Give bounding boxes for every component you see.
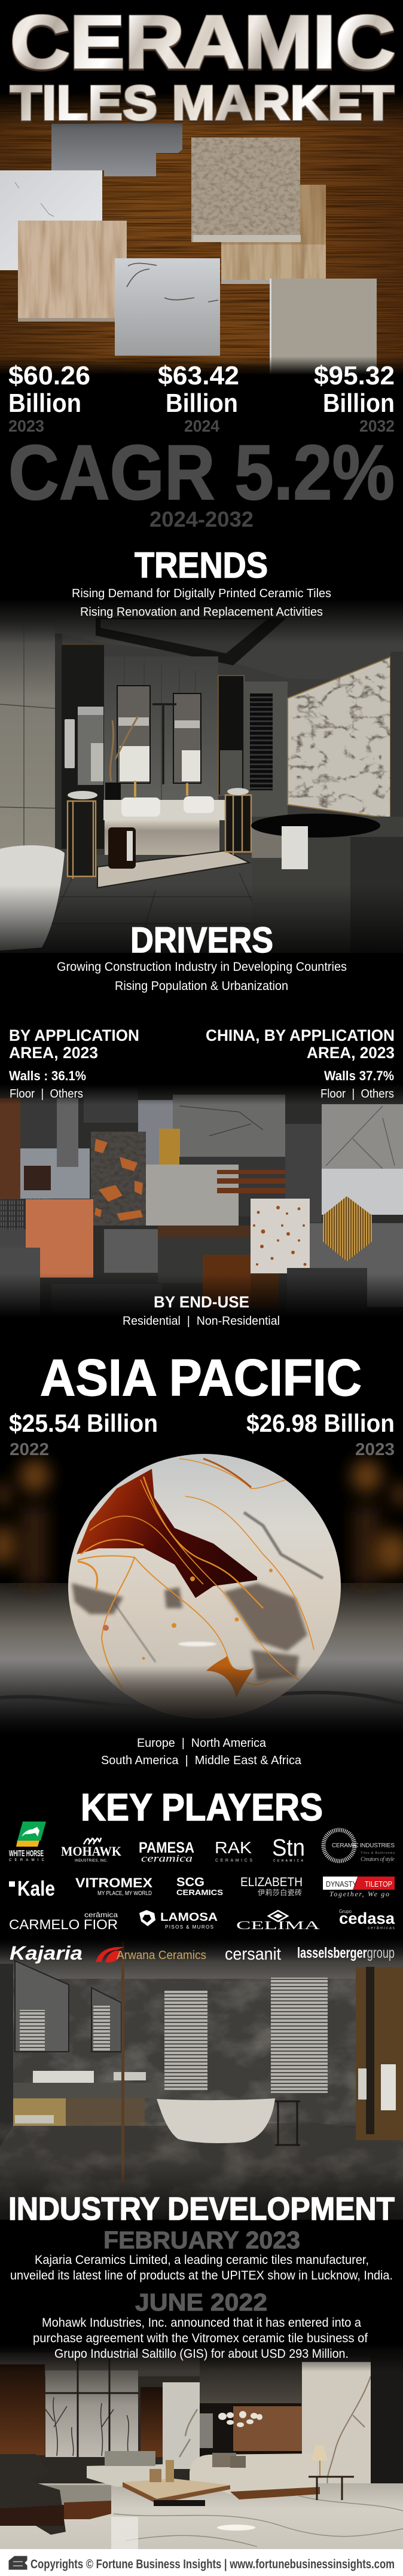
- heading: key players: KEY PLAYERS: [81, 1786, 323, 1829]
- mirror left: [117, 686, 150, 783]
- logo: arwana: [96, 1947, 206, 1963]
- second bathroom photo: [0, 1938, 403, 2220]
- china title: CHINA, BY APPLICATION: [206, 1026, 395, 1044]
- driver 2: Rising Population & Urbanization: [115, 979, 288, 993]
- side stand right: [225, 795, 251, 855]
- light grey slab: [146, 1165, 239, 1226]
- logo: carmelo fior: cerâmica: [84, 1911, 118, 1919]
- value 2024: $63.42: [158, 361, 239, 390]
- logo: mohawk: [61, 1838, 121, 1863]
- logo: kale: Kale: [17, 1877, 55, 1900]
- logo: mohawk: MOHAWK: [61, 1844, 121, 1859]
- wall beside marble: [244, 682, 288, 819]
- rust bars: [217, 1170, 298, 1193]
- grey slab: [104, 1229, 158, 1273]
- value 2032: $95.32: [314, 361, 395, 390]
- logo: pamesa: PAMESA: [139, 1839, 194, 1856]
- dark bathtub surround: [252, 817, 403, 953]
- other regions: Europe | North America: [137, 1737, 267, 1750]
- floor: [0, 855, 311, 953]
- CAGR period: 2024-2032: [149, 507, 254, 531]
- logo: carmelo fior: [9, 1911, 118, 1932]
- logo: dynasty tiletop: [323, 1877, 395, 1898]
- logo: celima: [236, 1911, 320, 1932]
- bathtub: [157, 2098, 275, 2143]
- logo: scg ceramics: SCG: [176, 1875, 204, 1889]
- grey veining: [72, 1583, 307, 1680]
- region value 2022: $25.54 Billion: [9, 1409, 158, 1437]
- region value 2022: [9, 1409, 158, 1459]
- logo: stn: Stn: [272, 1835, 305, 1861]
- logo: vitromex: MY PLACE, MY WORLD: [97, 1890, 152, 1897]
- china floor others: Floor | Others: [320, 1087, 394, 1101]
- rug: [97, 851, 249, 888]
- hero image: tiles on wood: [0, 93, 403, 375]
- other regions: South America | Middle East & Africa: [101, 1754, 302, 1767]
- development text 1: unveiled its latest line of products at the UPITEX show in Lucknow, India.: [10, 2269, 393, 2282]
- dark square: [24, 1166, 51, 1190]
- shower fixture: [152, 704, 176, 784]
- floor others: Floor | Others: [10, 1087, 83, 1101]
- dark marble: [51, 1284, 162, 1318]
- lamp and side table: [309, 2445, 354, 2500]
- tile: grey stepped slab: [51, 124, 182, 176]
- dark column right: [218, 676, 244, 795]
- walls share: Walls : 36.1%: [9, 1068, 86, 1083]
- segment: by application: [9, 1026, 139, 1101]
- logo: dynasty tiletop: TILETOP: [365, 1880, 392, 1889]
- region value 2022: 2022: [10, 1440, 49, 1459]
- orange strands: [78, 1459, 314, 1689]
- chandelier: [218, 2411, 262, 2427]
- region value 2023: $26.98 Billion: [246, 1409, 395, 1437]
- mirror left: [15, 1961, 69, 2052]
- logo: pamesa: [139, 1839, 194, 1864]
- footer logo: [8, 2556, 28, 2570]
- logo: elizabeth: ELIZABETH: [240, 1875, 303, 1889]
- white tub: [0, 845, 65, 951]
- marble orb: [68, 1454, 341, 1718]
- mirror centre: [91, 1988, 121, 2052]
- tile: veined marble: [115, 258, 220, 356]
- development text 2: purchase agreement with the Vitromex ceramic tile business of: [33, 2331, 368, 2345]
- value 2024: Billion: [166, 389, 238, 418]
- value 2023: 2023: [8, 417, 44, 435]
- bokeh lights: [0, 1459, 403, 1584]
- chaise lounge: [0, 2454, 111, 2535]
- logo: lamosa: LAMOSA: [160, 1911, 218, 1924]
- application title: AREA, 2023: [9, 1044, 98, 1062]
- vanity: [103, 796, 228, 820]
- granite tile: [91, 1132, 146, 1226]
- ribbed panel: [0, 1199, 51, 1229]
- window blinds centre: [164, 1991, 207, 2091]
- right dark wall: [371, 2355, 403, 2483]
- end-use title: BY END-USE: [154, 1293, 249, 1311]
- region value 2023: 2023: [355, 1440, 395, 1459]
- value 2032: Billion: [323, 389, 395, 418]
- drivers title: DRIVERS: [130, 920, 273, 960]
- logo: dynasty tiletop: Together, We go: [329, 1890, 389, 1898]
- radiator: [250, 693, 273, 790]
- lit glass under vanity: [105, 820, 219, 855]
- logo: rak: RAK: [215, 1838, 252, 1857]
- logo: lasselsberger group: lasselsbergergroup: [297, 1945, 395, 1961]
- title line 1: CERAMIC: [10, 1, 395, 84]
- logos: [9, 1822, 395, 1964]
- value 2032: 2032: [359, 417, 395, 435]
- windows: [45, 2358, 138, 2457]
- market values: [8, 361, 395, 435]
- mirror reflected blinds: [20, 2006, 110, 2051]
- development text 1: [10, 2253, 393, 2282]
- logo: cersanit: cersanit: [225, 1945, 281, 1964]
- tile: white marble: [0, 170, 102, 270]
- logo: ceramic industries: CERAMIC INDUSTRIES: [332, 1842, 395, 1849]
- logo: vitromex: [75, 1875, 152, 1897]
- marble feature wall: [288, 657, 390, 818]
- heading: trends: [72, 545, 331, 619]
- dark column left: [62, 644, 104, 849]
- tile collage: [0, 1084, 403, 1318]
- main sofa: [190, 2453, 320, 2499]
- wood door right: [356, 1967, 403, 2140]
- trend 2: Rising Renovation and Replacement Activities: [80, 606, 323, 619]
- application title: BY APPLICATION: [9, 1026, 139, 1044]
- black band behind developments: [0, 2220, 403, 2345]
- back wall: [103, 656, 218, 800]
- logo: cedasa: cedasa: [339, 1909, 395, 1927]
- orange splash: [206, 1656, 254, 1698]
- logo: kajaria: Kajaria: [10, 1942, 83, 1964]
- logo: scg ceramics: [176, 1875, 223, 1897]
- orb highlight: [178, 1642, 216, 1646]
- red streak: [77, 1469, 257, 1598]
- logo: scg ceramics: CERAMICS: [176, 1888, 223, 1897]
- living room photo: [0, 2345, 403, 2549]
- gold hexagon: [323, 1196, 372, 1261]
- footer: [0, 2549, 403, 2576]
- logo: white horse: CERAMIC: [9, 1859, 45, 1862]
- logo: pamesa: ceramica: [141, 1853, 193, 1864]
- gold faucets: [135, 781, 187, 797]
- logo: stn: CERAMICA: [273, 1859, 304, 1863]
- logo: dynasty tiletop: DYNASTY: [326, 1880, 357, 1889]
- development text 2: [33, 2316, 368, 2361]
- logo: rak: CERAMICS: [215, 1859, 252, 1863]
- trend 1: Rising Demand for Digitally Printed Ceramic Tiles: [72, 587, 331, 600]
- side table: [275, 2101, 300, 2146]
- ceiling: [0, 1938, 403, 1986]
- title: [10, 1, 395, 130]
- development text 1: Kajaria Ceramics Limited, a leading ceramic tiles manufacturer,: [35, 2253, 369, 2267]
- ceiling: [200, 2352, 403, 2406]
- logo: ceramic industries: Tiles & Bathrooms: [361, 1851, 395, 1855]
- driver 1: Growing Construction Industry in Developing Countries: [57, 960, 347, 974]
- logo: arwana: Arwana Ceramics: [117, 1949, 206, 1962]
- marble floor: [0, 2483, 403, 2549]
- china title: AREA, 2023: [307, 1044, 395, 1062]
- orange droplets: [103, 1569, 273, 1660]
- back room: [200, 2403, 302, 2457]
- end-use items: Residential | Non-Residential: [123, 1315, 280, 1328]
- tile: beige travertine: [18, 221, 127, 322]
- development date 2: JUNE 2022: [135, 2288, 267, 2316]
- dark marble edge: [0, 1964, 13, 2149]
- ceiling band: [0, 2352, 200, 2376]
- value 2024: 2024: [184, 417, 219, 435]
- logo: celima: CELIMA: [236, 1919, 320, 1932]
- rust tile: [203, 1255, 251, 1309]
- stool: [108, 827, 136, 869]
- curtains: [0, 2364, 163, 2457]
- logo: white horse: WHITE HORSE: [9, 1848, 44, 1859]
- tile: stone square: [191, 137, 301, 242]
- development date 1: FEBRUARY 2023: [103, 2226, 300, 2254]
- development text 2: Grupo Industrial Saltillo (GIS) for about USD 293 Million.: [54, 2347, 349, 2361]
- logo: ceramic industries: [323, 1830, 395, 1863]
- value 2023: Billion: [8, 389, 81, 418]
- segment: china by application: [206, 1026, 395, 1101]
- region: asia pacific: [9, 1349, 395, 1767]
- application title: [9, 1026, 139, 1062]
- terrazzo tile: [251, 1199, 310, 1273]
- logo: lamosa: [139, 1910, 218, 1930]
- plant: [110, 716, 138, 781]
- large pillar: [302, 2362, 371, 2495]
- development text 2: Mohawk Industries, Inc. announced that it has entered into a: [42, 2316, 361, 2330]
- counter and basin: [13, 2071, 157, 2126]
- coffee table: [123, 2460, 230, 2506]
- back sofa: [87, 2451, 166, 2487]
- segment: by end-use: [123, 1293, 280, 1328]
- bathroom photo: [0, 599, 403, 953]
- window blinds right: [271, 1978, 328, 2093]
- value 2032: [314, 361, 395, 435]
- CAGR: [8, 429, 395, 531]
- copper tile: [26, 1199, 93, 1278]
- logo: white horse: [9, 1822, 46, 1862]
- tub towel: [282, 826, 308, 869]
- marble wall: [0, 1979, 403, 2126]
- value 2023: [8, 361, 90, 435]
- china title: [206, 1026, 395, 1062]
- towel: [65, 719, 75, 768]
- tile: second travertine: [221, 185, 326, 284]
- logo: cedasa: Grupo: [339, 1909, 352, 1914]
- ceiling: [0, 599, 403, 682]
- value 2023: $60.26: [8, 361, 90, 390]
- logo: vitromex: VITROMEX: [75, 1875, 152, 1890]
- value 2024: [158, 361, 239, 435]
- region title: ASIA PACIFIC: [40, 1349, 362, 1407]
- glass frame: [121, 1941, 124, 2183]
- logo: rak: [215, 1838, 252, 1863]
- logo: elizabeth: 伊莉莎白瓷砖: [258, 1888, 302, 1897]
- china walls share: Walls 37.7%: [324, 1068, 394, 1083]
- right grey block: [310, 1223, 403, 1307]
- logo: cedasa: cerâmicas: [368, 1926, 395, 1930]
- heading: drivers: [57, 920, 347, 993]
- basins on stands: [68, 788, 249, 799]
- floor: [0, 2122, 403, 2220]
- asia pacific floor and bokeh: [0, 1459, 403, 1735]
- logo: carmelo fior: CARMELO FIOR: [9, 1917, 118, 1932]
- right marble slabs: [322, 1104, 403, 1215]
- title line 2: TILES MARKET: [10, 76, 394, 130]
- other regions: [101, 1737, 302, 1767]
- tile: light grey stone: [270, 279, 377, 374]
- logo: mohawk: INDUSTRIES, INC.: [75, 1859, 108, 1863]
- left wall: [0, 619, 55, 849]
- logo: lamosa: PISOS & MUROS: [165, 1924, 213, 1930]
- logo: elizabeth: [240, 1875, 303, 1897]
- side stand left: [68, 801, 96, 879]
- developments: [10, 2226, 393, 2361]
- logo: ceramic industries: Creators of style: [361, 1856, 395, 1863]
- region value 2023: [246, 1409, 395, 1459]
- small pillar: [163, 2382, 200, 2469]
- concrete block: [0, 1248, 40, 1316]
- black bathtub: [251, 814, 380, 838]
- trends title: TRENDS: [135, 545, 268, 585]
- planter box: [105, 783, 121, 800]
- mirror right: [173, 693, 201, 783]
